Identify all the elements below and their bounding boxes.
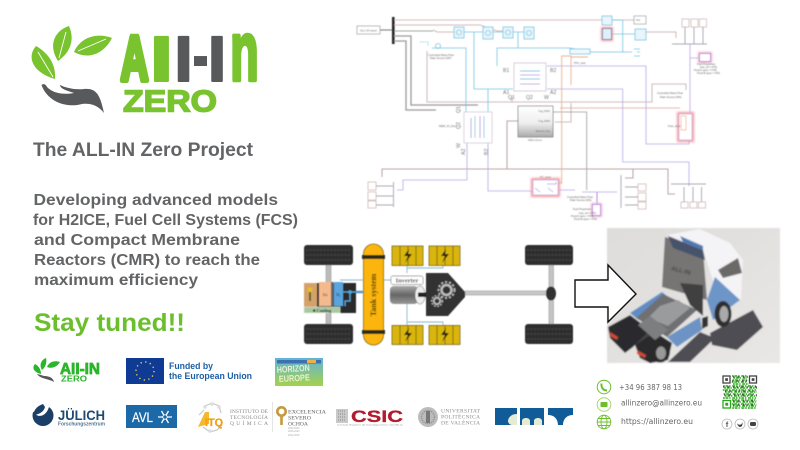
text block: project description: for H2ICE, Fuel Cell Systems (FCS) bbox=[33, 212, 298, 229]
purple lines bbox=[397, 44, 699, 204]
small diagram captions: Fuel Properties bbox=[573, 207, 592, 211]
membrane unit bbox=[518, 106, 553, 142]
logo: Jülich: Forschungszentrum bbox=[58, 422, 106, 428]
text: funded by bbox=[169, 360, 252, 381]
logo: Horizon Europe: HORIZON bbox=[276, 363, 310, 375]
logo wordmark ALL-IN: I bbox=[174, 23, 193, 95]
small diagram captions: Ref bbox=[636, 18, 640, 22]
wheels bbox=[650, 301, 732, 362]
logo: Horizon Europe: EUROPE bbox=[279, 372, 310, 384]
membrane unit: Fog_MMS bbox=[538, 120, 550, 123]
logo: Excelencia Severo Ochoa: EXCELENCIA bbox=[288, 410, 326, 416]
logo: Horizon Europe bbox=[275, 358, 323, 386]
wheels bbox=[304, 245, 573, 344]
logo: Excelencia Severo Ochoa: 2020-2024 bbox=[288, 427, 300, 430]
text: Instituto de Tecnología Química: QUÍMICA bbox=[230, 419, 268, 427]
text: Instituto de Tecnología Química bbox=[230, 409, 269, 427]
port labels: A2 bbox=[461, 149, 467, 155]
boundary blocks bbox=[368, 19, 706, 209]
logo: AVL: AVL bbox=[132, 409, 153, 425]
port labels: B1 bbox=[503, 68, 509, 74]
icon: facebook: f bbox=[726, 420, 729, 429]
logo: European Union flag bbox=[126, 358, 164, 384]
logo: CSIC bbox=[336, 407, 403, 426]
ground shadow bbox=[668, 310, 763, 362]
fuel cell system: Air bbox=[322, 292, 328, 297]
membrane unit: Fog_MMS bbox=[538, 110, 550, 113]
text block: project description: Developing advanced models bbox=[34, 192, 278, 209]
small diagram captions: MEM_IN_Zero bbox=[439, 124, 457, 128]
logo: ITQ bbox=[198, 402, 223, 433]
boundary connectors bbox=[376, 27, 707, 208]
port labels: Q2 bbox=[526, 95, 533, 101]
logo: ALL-IN Zero small bbox=[33, 358, 100, 384]
logo: Excelencia Severo Ochoa: SEVERO bbox=[288, 416, 311, 422]
small diagram captions: Rate Source (MA) bbox=[570, 198, 592, 202]
membrane unit: Memory Gas bbox=[536, 130, 551, 133]
port labels bbox=[456, 68, 556, 155]
logo: ITQ: ITQ bbox=[205, 417, 223, 429]
small diagram captions: Fluid B spec = FFE bbox=[574, 217, 597, 221]
logo: ALL-IN Zero small: AII-IN bbox=[60, 361, 100, 378]
social media icons bbox=[722, 419, 758, 429]
icon: email bbox=[597, 398, 611, 411]
fuel cell system bbox=[304, 280, 391, 313]
tank system: Tank system bbox=[369, 273, 378, 316]
highlighted components bbox=[531, 27, 712, 217]
logo word ZERO: ZERO bbox=[123, 84, 217, 118]
small diagram captions: Controlled Mass Flow bbox=[428, 53, 454, 57]
icon: phone bbox=[597, 380, 611, 394]
small diagram captions: Controlled Mass Flow bbox=[567, 195, 593, 199]
logo wordmark ALL-IN: I bbox=[150, 23, 173, 95]
cab: ALL-IN bbox=[671, 266, 691, 277]
logo: Universitat Politècnica de València: DE VALÈNCIA bbox=[441, 418, 480, 426]
inverter: Inverter bbox=[396, 278, 419, 285]
logo: Universitat Politècnica de València bbox=[418, 407, 481, 427]
port labels: W bbox=[544, 95, 549, 101]
logo: CSIC: Consejo Superior de Investigaciones Científicas bbox=[337, 424, 403, 426]
contact email: allinzero@allinzero.eu bbox=[621, 398, 702, 408]
batteries bbox=[392, 246, 460, 344]
small diagram captions: Rate Source (MA) bbox=[660, 95, 682, 99]
contact website: https://allinzero.eu bbox=[621, 417, 693, 426]
heat exchanger B1 B2 bbox=[514, 63, 546, 91]
call to action: stay tuned: Stay tuned!! bbox=[34, 309, 185, 337]
text: funded by: the European Union bbox=[169, 370, 252, 381]
diagram: vehicle powertrain bbox=[304, 244, 573, 345]
logo: ALL-IN Zero small: ZERO bbox=[61, 374, 87, 384]
small diagram captions: Rate Source (MF) bbox=[430, 56, 451, 60]
small diagram captions: PFV_sink bbox=[574, 61, 586, 65]
text: funded by: Funded by bbox=[169, 360, 214, 371]
logo: Jülich: JÜLICH bbox=[58, 407, 105, 423]
logo: Universitat Politècnica de València: POLITÈCNICA bbox=[441, 412, 480, 420]
small diagram captions: Controlled Mass Flow bbox=[657, 91, 683, 95]
battery wiring bbox=[407, 265, 443, 326]
logo: CSIC: CSIC bbox=[351, 407, 403, 426]
orange lines bbox=[559, 56, 588, 183]
axles and shaft bbox=[326, 265, 556, 324]
fuel cell system: H₂ bbox=[336, 292, 341, 297]
port labels: Q1 bbox=[456, 106, 462, 113]
stack exchanger bbox=[464, 112, 492, 143]
photo: truck render bbox=[607, 228, 780, 363]
valves and blocks bbox=[420, 16, 646, 56]
logo wordmark ALL-IN: A bbox=[121, 25, 148, 94]
port labels: Q1 bbox=[508, 95, 515, 101]
input block and bus bbox=[357, 17, 395, 44]
small diagram captions: Fluid B spec = FFE bbox=[697, 71, 720, 75]
QR code bbox=[723, 376, 757, 408]
text block: project description: and Compact Membrane bbox=[34, 232, 240, 249]
port labels: Q2 bbox=[456, 122, 462, 129]
small diagram captions: fuel_ref = FFE bbox=[700, 65, 717, 69]
logo: Excelencia Severo Ochoa bbox=[277, 407, 326, 437]
title: The ALL-IN Zero Project bbox=[33, 140, 254, 161]
port labels: A1 bbox=[503, 90, 509, 96]
small diagram captions: Fluid A spec = FFE bbox=[571, 214, 594, 218]
text: Instituto de Tecnología Química: INSTITUTO DE bbox=[230, 409, 269, 415]
input block and bus: ALL-IN input bbox=[360, 28, 377, 32]
chassis bbox=[630, 292, 708, 347]
arrow: chassis to truck bbox=[575, 265, 636, 322]
logo: CMT bbox=[495, 408, 573, 425]
text block: project description: maximum efficiency bbox=[34, 272, 198, 289]
logo wordmark ALL-IN bbox=[121, 6, 259, 101]
divider bbox=[271, 402, 274, 432]
tank system bbox=[362, 244, 385, 345]
small diagram captions: Fuel_zone bbox=[668, 124, 681, 128]
logo: Excelencia Severo Ochoa: OCHOA bbox=[288, 422, 308, 428]
port labels: B2 bbox=[484, 149, 490, 155]
icon: twitter bbox=[735, 419, 745, 429]
port labels: W bbox=[456, 143, 462, 148]
logo: AVL bbox=[126, 405, 177, 428]
logo: Excelencia Severo Ochoa: 2012-2016 bbox=[288, 434, 300, 437]
logo: ALL-IN Zero bbox=[32, 6, 259, 119]
inverter bbox=[391, 276, 423, 285]
contact phone: +34 96 387 98 13 bbox=[619, 383, 682, 392]
red signal lines bbox=[382, 20, 686, 194]
gearbox bbox=[426, 273, 465, 316]
gray signal lines bbox=[394, 31, 478, 110]
icon: globe bbox=[597, 415, 611, 429]
small diagram captions: Fluid A spec = FFE bbox=[694, 68, 717, 72]
small diagram captions bbox=[428, 16, 720, 221]
logo wordmark ALL-IN: - bbox=[192, 7, 209, 101]
cyan coolant lines bbox=[432, 20, 635, 112]
membrane unit: MEA Zone bbox=[528, 138, 542, 142]
small diagram captions: fuel_ref = FFE bbox=[579, 211, 596, 215]
contact details bbox=[597, 380, 702, 429]
fuel cell system: ■ Cooling bbox=[313, 308, 332, 313]
chart: system simulation block diagram bbox=[357, 16, 720, 221]
logo: Jülich bbox=[32, 402, 106, 428]
icon: youtube bbox=[748, 419, 758, 429]
cab bbox=[662, 229, 743, 320]
text block: project description: Reactors (CMR) to reach the bbox=[34, 252, 260, 269]
electric motor bbox=[390, 286, 427, 304]
logo: Universitat Politècnica de València: UNIVERSITAT bbox=[441, 408, 481, 414]
icon: leaves and hand bbox=[32, 26, 112, 113]
small diagram captions: Fuel Properties bbox=[697, 62, 716, 66]
port labels: A2 bbox=[550, 90, 556, 96]
logo wordmark ALL-IN: n bbox=[230, 6, 259, 99]
small diagram captions: FC_zone bbox=[540, 175, 551, 179]
logo: Excelencia Severo Ochoa: 2016-2020 bbox=[288, 430, 300, 433]
logo wordmark ALL-IN: I bbox=[208, 23, 226, 95]
rear running gear bbox=[608, 315, 672, 363]
text: Instituto de Tecnología Química: TECNOLOGÍA bbox=[230, 413, 268, 421]
text block: project description bbox=[33, 192, 298, 289]
port labels: B2 bbox=[550, 68, 556, 74]
